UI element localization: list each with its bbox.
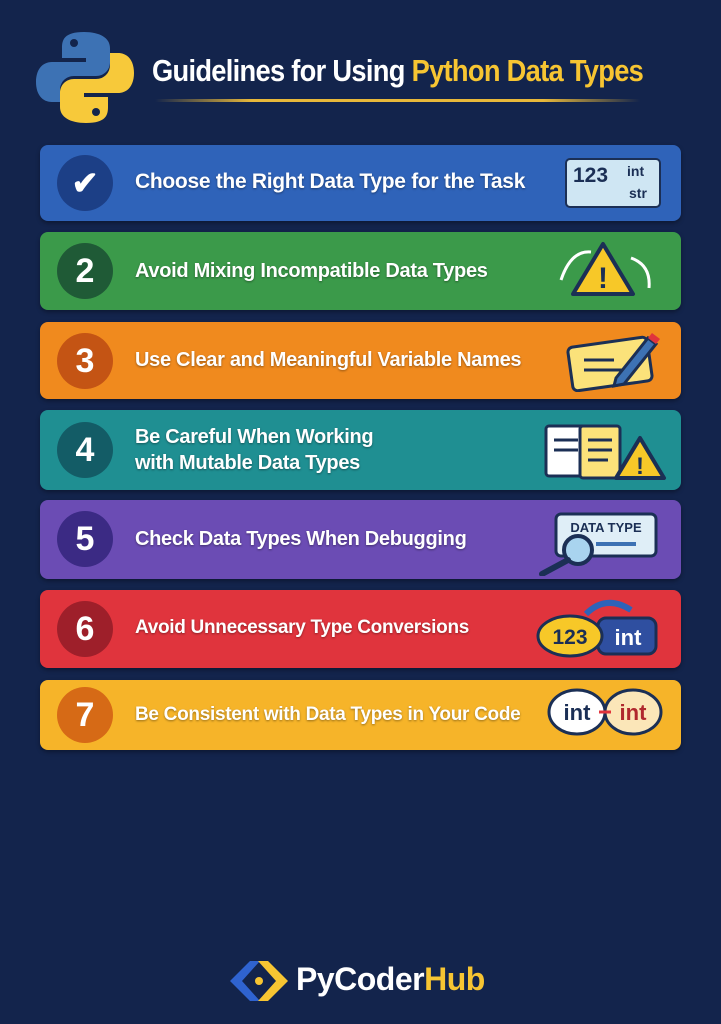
icon: note pencil xyxy=(566,333,660,392)
icon: magnifier data type: DATA TYPE xyxy=(570,520,642,535)
icon: check xyxy=(57,155,113,211)
panel: 1 xyxy=(40,145,681,221)
icon: 123 to int: 123 xyxy=(552,626,588,649)
header xyxy=(36,32,643,123)
number 5 xyxy=(57,511,113,567)
number 7 xyxy=(57,687,113,743)
panel: 6 xyxy=(40,590,681,668)
icon: 123 to int xyxy=(536,600,658,658)
icon: int int bubbles xyxy=(548,688,662,736)
icon: pycoderhub logo xyxy=(230,961,288,1001)
icon: int int bubbles: int xyxy=(564,700,591,725)
number 3 xyxy=(57,333,113,389)
brand name: PyCoderHub xyxy=(296,961,485,997)
number 4 xyxy=(57,422,113,478)
text 5: Check Data Types When Debugging xyxy=(135,528,466,550)
icon: int int bubbles: int xyxy=(620,700,647,725)
icon: 123 to int: int xyxy=(615,625,642,650)
icon: 123 int str xyxy=(565,158,661,208)
text 7: Be Consistent with Data Types in Your Code xyxy=(135,704,520,725)
icon: clipboards warning xyxy=(544,424,666,480)
title underline xyxy=(155,99,640,102)
number 2: 2 xyxy=(76,252,94,290)
text 6: Avoid Unnecessary Type Conversions xyxy=(135,617,469,638)
number 2 xyxy=(57,243,113,299)
text 4: Be Careful When Working xyxy=(135,426,373,448)
panel: 4 xyxy=(40,410,681,490)
number 6: 6 xyxy=(76,610,94,648)
icon: clipboards warning: ! xyxy=(636,453,644,480)
icon: magnifier data type xyxy=(539,512,658,576)
number 6 xyxy=(57,601,113,657)
footer: logo xyxy=(230,961,485,1001)
number 3: 3 xyxy=(76,342,94,380)
text 4 xyxy=(134,426,374,475)
text 4: with Mutable Data Types xyxy=(135,452,360,474)
panel: 5 xyxy=(40,500,681,579)
text 3: Use Clear and Meaningful Variable Names xyxy=(135,349,521,371)
panel: 2 xyxy=(40,232,681,310)
panel: 3 xyxy=(40,322,681,399)
number 5: 5 xyxy=(76,520,94,558)
text 2: Avoid Mixing Incompatible Data Types xyxy=(135,260,488,282)
icon: check: ✔ xyxy=(72,165,98,201)
icon: warning xyxy=(560,242,651,296)
icon: python logo xyxy=(36,32,134,123)
text 1: Choose the Right Data Type for the Task xyxy=(135,170,525,193)
icon: 123 int str: int xyxy=(627,163,644,179)
icon: 123 int str: 123 xyxy=(573,164,608,187)
number 7: 7 xyxy=(76,696,94,734)
icon: warning: ! xyxy=(598,262,608,295)
panel: 7 xyxy=(40,680,681,750)
number 4: 4 xyxy=(76,431,94,469)
title: Guidelines for Using Python Data Types xyxy=(152,53,643,88)
icon: 123 int str: str xyxy=(629,185,647,201)
